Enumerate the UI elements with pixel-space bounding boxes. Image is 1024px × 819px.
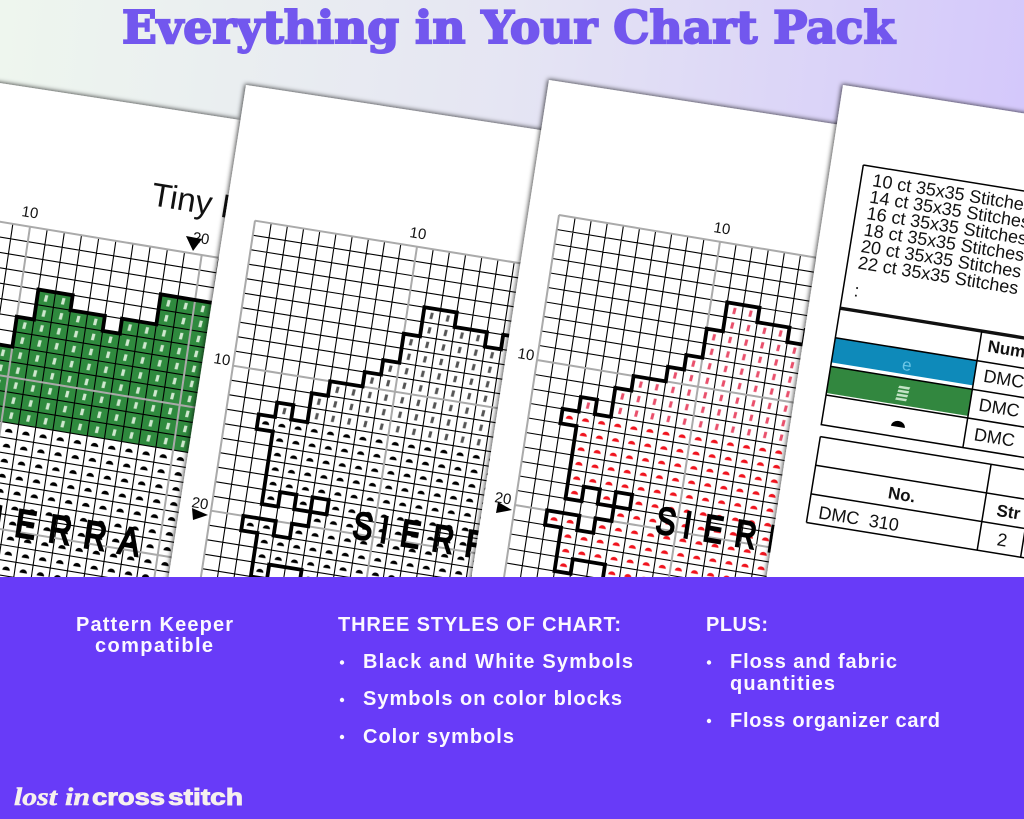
page sheet 2 <box>165 85 560 600</box>
text block: three styles of chart <box>338 614 633 748</box>
text block: plus extras <box>706 614 940 732</box>
logo: stitch <box>168 784 243 810</box>
key page tables <box>805 165 1024 564</box>
row label 10: 10 <box>516 345 536 365</box>
floss legend table <box>821 308 1024 466</box>
center arrow left <box>496 502 512 513</box>
text block: plus extras: Floss and fabric <box>730 651 897 673</box>
text block: compatibility: compatible <box>95 635 213 657</box>
floss card table: 2 <box>996 529 1009 551</box>
grid with red symbols: SIERRA <box>653 499 823 569</box>
column label 10: 10 <box>20 203 40 223</box>
text block: compatibility: Pattern Keeper <box>76 614 233 636</box>
floss card table: No. <box>887 483 917 506</box>
row label 20: 20 <box>190 494 210 514</box>
text block: three styles of chart: THREE STYLES OF CHART: <box>338 614 621 636</box>
row label 20: 20 <box>493 489 513 509</box>
page sheet 4 <box>763 85 1024 600</box>
page sheet 1 <box>0 80 240 600</box>
center arrow top <box>186 236 202 251</box>
fabric size box: 16 ct 35x35 Stitches <box>865 203 1024 249</box>
text block: plus extras: Floss organizer card <box>730 710 940 732</box>
logo: cross <box>92 784 165 810</box>
center arrow left <box>192 508 208 520</box>
page sheet 3 <box>468 80 860 600</box>
panel: floss and fabric key page <box>763 85 1024 600</box>
fabric size box: 20 ct 35x35 Stitches <box>860 236 1023 282</box>
text block: three styles of chart: Symbols on color blocks <box>363 688 622 710</box>
grid with red symbols <box>503 214 816 577</box>
title: Everything in Your Chart Pack <box>122 1 896 54</box>
text block: three styles of chart: Color symbols <box>363 726 514 748</box>
column label 10: 10 <box>408 224 428 244</box>
panel: black and white symbol chart page <box>164 81 542 577</box>
floss legend table: DMC <box>977 395 1021 421</box>
text block: plus extras: PLUS: <box>706 614 768 636</box>
grid with black symbols: SIERRA <box>350 505 521 573</box>
text block: plus extras: quantities <box>730 673 835 695</box>
logo <box>14 784 243 811</box>
fabric size box <box>840 165 1024 350</box>
column label 20: 20 <box>191 229 211 249</box>
floss card table: Str <box>995 501 1022 524</box>
page heading: Tiny Hill <box>149 175 269 231</box>
panel: color symbol chart page <box>467 76 838 577</box>
floss legend table: DMC <box>973 424 1016 451</box>
grid with colored symbols <box>0 220 219 577</box>
grid with black symbols <box>200 220 520 577</box>
floss card table: DMC 310 <box>817 502 900 535</box>
text block: compatibility <box>76 614 233 657</box>
logo: in <box>65 784 90 811</box>
column label 10: 10 <box>712 219 732 239</box>
panel: chart page with symbols on color blocks <box>0 78 240 577</box>
floss card table <box>806 437 1024 564</box>
text block: three styles of chart: Black and White Symbols <box>363 651 633 673</box>
floss legend table: e <box>901 355 913 375</box>
panel: purple information band <box>0 577 1024 819</box>
fabric size box: 18 ct 35x35 Stitches <box>863 220 1024 265</box>
logo: lost <box>14 784 58 811</box>
fabric size box: 22 ct 35x35 Stitches <box>857 253 1020 298</box>
row label 10: 10 <box>212 350 232 370</box>
fabric size box: : <box>853 280 861 301</box>
